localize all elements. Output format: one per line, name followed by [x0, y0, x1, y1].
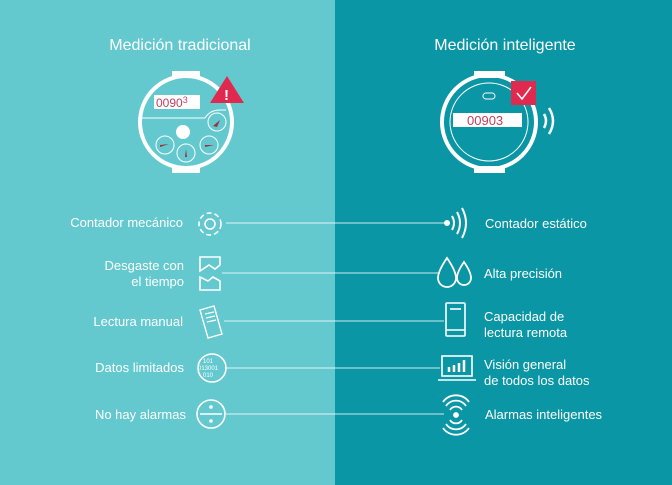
title: traditional: Medición tradicional: [109, 37, 251, 54]
text: Capacidad de: [484, 309, 564, 324]
icon: data: 013001: [198, 366, 219, 372]
icon: laptop: [438, 356, 476, 380]
labels: traditional: Contador mecánico: [70, 215, 183, 230]
icon: no alarm: [197, 400, 225, 428]
icon: data: 010: [203, 373, 214, 379]
text: lectura remota: [484, 325, 567, 340]
icon: traditional meter: 0090: [156, 96, 183, 110]
panel: smart: [335, 0, 672, 485]
text: Lectura manual: [93, 314, 183, 329]
icon: data: 101: [203, 359, 214, 365]
panel: traditional: [0, 0, 335, 485]
icon: static counter waves: [445, 208, 466, 238]
title: smart: Medición inteligente: [434, 37, 576, 54]
icon: traditional meter: 3: [183, 95, 188, 105]
text: Alarmas inteligentes: [485, 407, 602, 422]
text: de todos los datos: [484, 373, 590, 388]
connector lines: [222, 223, 446, 414]
text: Alta precisión: [484, 266, 562, 281]
icon: gear: [199, 213, 221, 235]
icon: smart meter: 00903: [467, 113, 503, 128]
text: el tiempo: [131, 274, 184, 289]
icon: tablet: [446, 303, 465, 336]
text: Datos limitados: [95, 360, 184, 375]
text: No hay alarmas: [95, 407, 186, 422]
icon: wear: [200, 257, 220, 290]
icon: data: [198, 354, 226, 382]
icon: drops: [438, 258, 471, 287]
text: Desgaste con: [104, 258, 184, 273]
icon: traditional meter: !: [224, 87, 229, 104]
icon: traditional meter: [140, 71, 244, 173]
icon: manual reading: [200, 306, 222, 338]
labels: smart: Contador estático: [485, 216, 587, 231]
icon: smart meter: [442, 71, 553, 173]
text: Visión general: [484, 357, 566, 372]
icon: smart alarms: [443, 395, 469, 435]
